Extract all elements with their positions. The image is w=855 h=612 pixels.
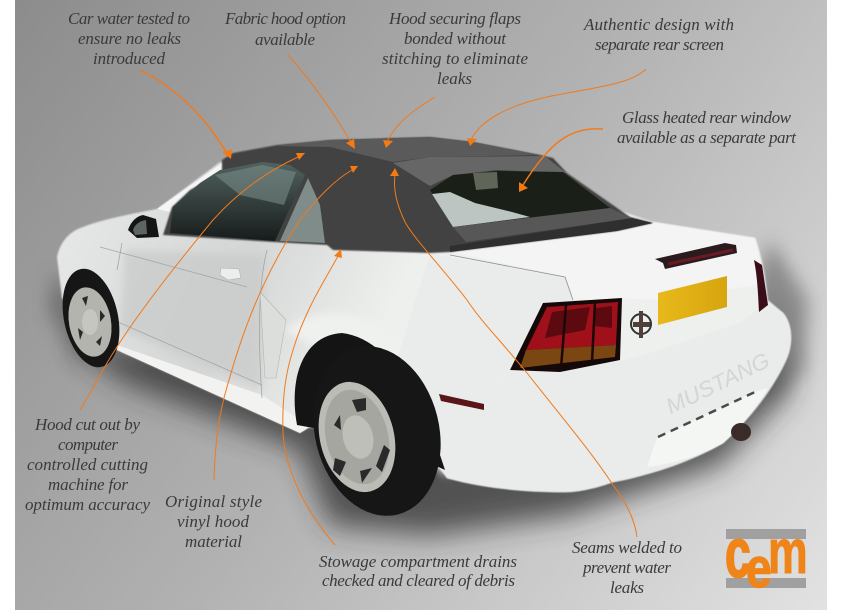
text: stowage compartment [319, 552, 517, 590]
hood rear panel [393, 156, 566, 186]
text: car water tested: Car water tested to [68, 9, 190, 28]
car shadow [48, 240, 808, 535]
text: original style vinyl [165, 492, 262, 551]
arrow: car water tested [140, 70, 232, 159]
window reflection [215, 165, 296, 205]
text: hood securing flaps: leaks [437, 69, 472, 88]
text: glass heated rear window [617, 108, 797, 147]
hood edge rail [450, 218, 653, 252]
sill [117, 345, 308, 433]
rear wheel arch [295, 333, 445, 470]
logo: cem: c [725, 513, 751, 592]
car photo [48, 137, 808, 535]
text: authentic design [583, 15, 734, 54]
arrow: rear screen [467, 69, 646, 146]
side marker [439, 394, 484, 410]
text: original style vinyl: Original style [165, 492, 262, 511]
rear window tree reflection [473, 172, 498, 190]
text: car water tested: introduced [93, 49, 166, 68]
logo: cem: e [746, 537, 772, 599]
text: car water tested: ensure no leaks [78, 29, 181, 48]
right tail light [754, 260, 768, 312]
trunk lid [450, 222, 764, 302]
text: hood securing flaps: bonded without [404, 29, 507, 48]
Mustang emblem [631, 311, 651, 338]
text: seams welded: prevent water [582, 558, 671, 577]
text: hood cut out: machine for [48, 475, 128, 494]
third brake light [655, 243, 737, 269]
side window glass [170, 162, 305, 241]
rear window [430, 171, 610, 227]
text: original style vinyl: vinyl hood [177, 512, 250, 531]
licence plate [658, 276, 727, 325]
trunk edge line [450, 255, 573, 300]
rear window reflection [432, 192, 530, 227]
text: seams welded: leaks [610, 578, 644, 597]
text: original style vinyl: material [185, 532, 242, 551]
text: authentic design: Authentic design with [583, 15, 734, 34]
rear wheel [296, 333, 458, 529]
rear fender panel [285, 314, 447, 478]
text: fabric hood option: available [255, 30, 315, 49]
arrow: fabric hood [288, 55, 355, 149]
logo: cem [725, 513, 808, 599]
door shading [120, 250, 265, 390]
text: fabric hood option: Fabric hood option [224, 9, 346, 28]
arrows [80, 55, 646, 545]
text: hood securing flaps: Hood securing flaps [388, 9, 521, 28]
quarter glass [280, 178, 325, 243]
text: seams welded [572, 538, 682, 597]
hood top panel [277, 137, 540, 162]
tail light [510, 298, 622, 372]
text: glass heated rear window: Glass heated rear window [622, 108, 792, 127]
bumper slots [658, 392, 755, 437]
text: hood cut out: computer [58, 435, 118, 454]
text: hood cut out: Hood cut out by [34, 415, 140, 434]
rear fascia [620, 285, 767, 362]
rear quarter panel [395, 254, 573, 383]
door handle [220, 268, 241, 280]
rear hood strip [453, 208, 632, 242]
side scoop [260, 292, 286, 378]
Mustang bumper lettering: MUSTANG [662, 347, 774, 419]
arrow: stowage drains [283, 249, 342, 545]
door seam lines [100, 243, 267, 398]
windscreen frame highlight [157, 163, 224, 212]
text: glass heated rear window: available as a separate part [617, 128, 797, 147]
bumper [395, 302, 791, 492]
exhaust [731, 423, 751, 441]
text: seams welded: Seams welded to [572, 538, 682, 557]
text: hood cut out [25, 415, 150, 514]
text: stowage compartment: checked and cleared of debris [322, 571, 515, 590]
arrow: vinyl hood [214, 166, 358, 480]
bumper lower panel [647, 388, 768, 467]
text: hood cut out: optimum accuracy [25, 495, 150, 514]
brake light glow [668, 250, 733, 264]
logo: cem: m [768, 518, 808, 587]
text: car water tested [68, 9, 190, 68]
arrow: seams welded [390, 168, 637, 537]
fabric hood [163, 137, 653, 253]
arrow: hood cut out [80, 153, 305, 410]
front wheel [54, 263, 128, 373]
text: hood securing flaps [382, 9, 528, 88]
text: fabric hood option [224, 9, 346, 49]
arrow: hood securing flaps [383, 97, 435, 148]
text: authentic design: separate rear screen [595, 35, 724, 54]
car body [57, 162, 791, 492]
arrow: heated rear window [519, 129, 603, 192]
text: hood securing flaps: stitching to eliminate [382, 49, 528, 68]
text: hood cut out: controlled cutting [27, 455, 148, 474]
side mirror [128, 215, 159, 238]
text: stowage compartment: Stowage compartment drains [319, 552, 517, 571]
